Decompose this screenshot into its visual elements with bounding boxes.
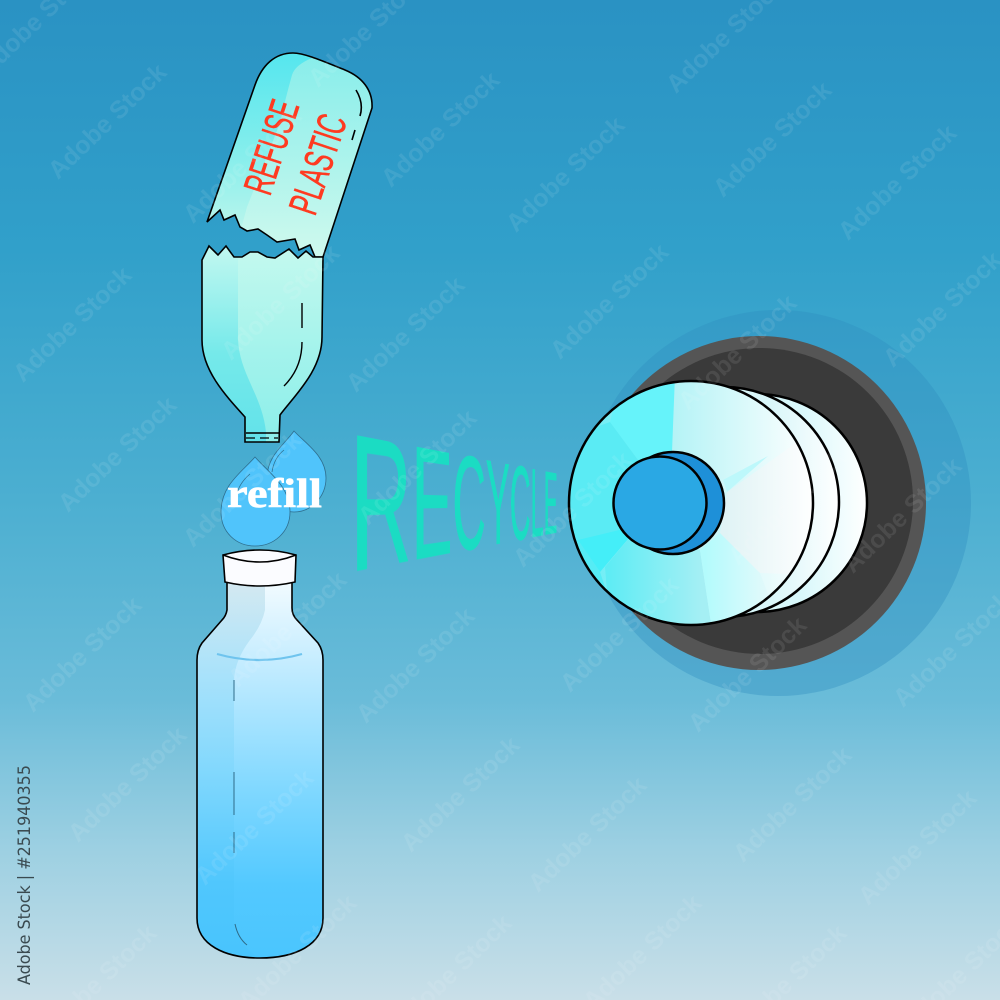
label: refuse plastic: REFUSE (235, 94, 308, 200)
stock watermarks and id: Adobe Stock (833, 119, 962, 245)
stock watermarks and id: Adobe Stock (545, 238, 674, 364)
stock watermarks and id: Adobe Stock (683, 611, 812, 737)
stock watermarks and id: Adobe Stock (523, 771, 652, 897)
label: refill: refill (227, 470, 322, 516)
torn bottle neck (202, 240, 330, 445)
stock watermarks and id: Adobe Stock (838, 452, 967, 578)
stock watermarks and id: Adobe Stock (190, 764, 319, 890)
label: refuse plastic (235, 94, 356, 220)
torn bottle top (206, 52, 373, 258)
stock watermarks and id: Adobe Stock (351, 602, 480, 728)
stock watermarks and id: Adobe Stock (673, 289, 802, 415)
stock watermarks and id: Adobe Stock (353, 404, 482, 530)
stock watermarks and id: Adobe Stock (18, 591, 147, 717)
crushed bottle seen end-on (560, 375, 867, 630)
stock id label: Adobe Stock | #251940355 (15, 765, 35, 985)
stock watermarks and id: Adobe Stock (216, 239, 345, 365)
stock watermarks and id: Adobe Stock (508, 446, 637, 572)
recycling hole (585, 310, 971, 696)
stock watermarks and id: Adobe Stock (178, 102, 307, 228)
stock watermarks and id: Adobe Stock (43, 58, 172, 184)
water drops (221, 431, 326, 546)
stock watermarks and id: Adobe Stock (53, 391, 182, 517)
stock watermarks and id: Adobe Stock (178, 426, 307, 552)
stock watermarks and id: Adobe Stock (853, 784, 982, 910)
stock watermarks and id: Adobe Stock (8, 261, 137, 387)
stock watermarks and id: Adobe Stock (723, 444, 852, 570)
bottle cap (223, 550, 296, 586)
stock watermarks and id: Adobe Stock (63, 721, 192, 847)
label: refuse plastic: PLASTIC (280, 109, 356, 220)
stock watermarks and id: Adobe Stock (396, 731, 525, 857)
stock watermarks and id: Adobe Stock (728, 741, 857, 867)
stock watermarks and id: Adobe Stock (376, 66, 505, 192)
stock watermarks and id: Adobe Stock (708, 76, 837, 202)
heading: recycle in perspective: RECYCLE (349, 392, 558, 614)
stock watermarks and id: Adobe Stock (341, 271, 470, 397)
stock watermarks and id: Adobe Stock (555, 571, 684, 697)
stock watermarks and id: Adobe Stock (223, 566, 352, 692)
stock watermarks and id: Adobe Stock (501, 111, 630, 237)
full water bottle (197, 550, 325, 960)
